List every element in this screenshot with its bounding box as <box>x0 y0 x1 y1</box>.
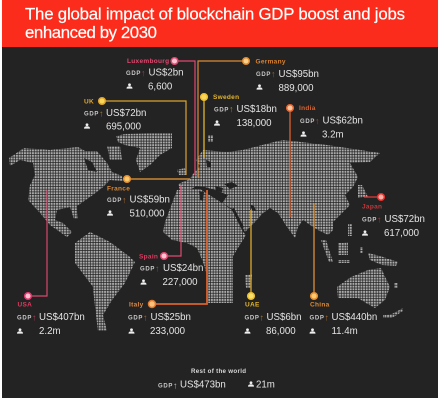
callout: Italy: ↑ <box>143 312 148 322</box>
callout: Luxembourg <box>126 58 195 175</box>
callout: Sweden <box>201 94 277 158</box>
callout: Spain <box>139 185 203 288</box>
callout: USA: US$407bn <box>39 312 85 323</box>
callout: China: GDP <box>310 316 325 322</box>
callout: India: 3.2m <box>322 130 344 140</box>
callout: China <box>310 203 377 337</box>
callout: UK <box>84 98 186 175</box>
callout: Luxembourg: GDP <box>126 71 141 77</box>
callout: Italy <box>128 190 207 337</box>
callout: Italy: Italy <box>129 302 144 308</box>
callout: Sweden: Sweden <box>213 94 239 101</box>
callout: UAE: 86,000 <box>266 326 296 337</box>
rest of the world: 21m <box>256 380 275 390</box>
callout: India: ↑ <box>315 116 320 126</box>
rest of the world: ↑ <box>173 380 178 390</box>
callout: France: France <box>107 186 130 192</box>
callout: UAE: US$6bn <box>266 312 302 323</box>
rest of the world: Rest of the world <box>191 368 246 375</box>
callout: Italy: GDP <box>128 316 143 322</box>
callout: Sweden: ↑ <box>229 104 234 114</box>
callout: Germany: US$95bn <box>278 69 319 80</box>
callout: USA: USA <box>18 302 32 308</box>
callout: Japan: US$72bn <box>384 214 425 225</box>
callout: China: US$440bn <box>332 312 377 323</box>
callout: Luxembourg: US$2bn <box>148 68 184 78</box>
callout: UK: GDP <box>84 112 99 118</box>
callout: Luxembourg: 6,600 <box>148 82 173 92</box>
callout: USA: ↑ <box>32 312 36 322</box>
callout: France: GDP <box>107 198 122 204</box>
callout: China: 11.4m <box>332 326 358 337</box>
callout: Spain: GDP <box>140 266 155 272</box>
callout: UAE <box>244 210 302 337</box>
callout: India: India <box>299 105 316 112</box>
callout: UAE: GDP <box>244 316 260 322</box>
callout: France <box>107 176 190 220</box>
callout: UAE: UAE <box>245 302 260 308</box>
callout: Sweden: 138,000 <box>236 118 272 129</box>
callout: Japan: Japan <box>362 204 382 210</box>
callout: Japan: GDP <box>362 218 377 224</box>
callout: UK: 695,000 <box>106 122 142 132</box>
callout: UK: US$72bn <box>106 108 146 119</box>
callout: USA <box>17 190 85 337</box>
callout: Italy: 233,000 <box>150 326 186 337</box>
callout: Germany: ↑ <box>271 69 276 79</box>
callout: Sweden: GDP <box>214 108 229 114</box>
callout: Japan: 617,000 <box>384 228 420 239</box>
callout: Germany <box>198 58 319 178</box>
callout: UK: UK <box>84 98 94 106</box>
callout: Japan <box>362 194 425 239</box>
dotted world map <box>9 133 403 331</box>
callout: Spain: ↑ <box>155 264 160 274</box>
callout: Germany: Germany <box>256 58 286 66</box>
callout: Germany: GDP <box>256 72 271 78</box>
callout: Luxembourg: Luxembourg <box>127 58 169 65</box>
rest of the world: GDP <box>158 384 173 390</box>
rest of the world <box>158 368 275 390</box>
rest of the world: US$473bn <box>180 380 226 390</box>
title banner: The global impact of blockchain GDP boost and jobs <box>25 4 405 24</box>
callout: Spain: Spain <box>139 254 158 260</box>
title banner <box>2 0 438 47</box>
title banner: enhanced by 2030 <box>25 23 157 42</box>
callout: China: ↑ <box>324 312 329 322</box>
callout: Sweden: US$18bn <box>236 104 277 115</box>
callout: USA: 2.2m <box>39 326 61 337</box>
callout: Japan: ↑ <box>377 214 382 224</box>
callout: France: 510,000 <box>130 208 165 220</box>
callout: Spain: US$24bn <box>163 263 203 274</box>
callout: India: US$62bn <box>322 116 363 126</box>
callout: China: China <box>310 302 330 308</box>
callout: UAE: ↑ <box>260 312 264 322</box>
callout: USA: GDP <box>17 316 32 322</box>
callout: France: US$59bn <box>130 194 170 206</box>
callout: UK: ↑ <box>99 108 104 118</box>
callout: Germany: 889,000 <box>278 83 314 94</box>
callout: France: ↑ <box>122 195 126 205</box>
callout: Italy: US$25bn <box>150 312 191 323</box>
callout: Luxembourg: ↑ <box>141 68 146 78</box>
callout: Spain: 227,000 <box>162 277 198 288</box>
callout: India: GDP <box>300 119 315 125</box>
callout: India <box>287 105 363 217</box>
